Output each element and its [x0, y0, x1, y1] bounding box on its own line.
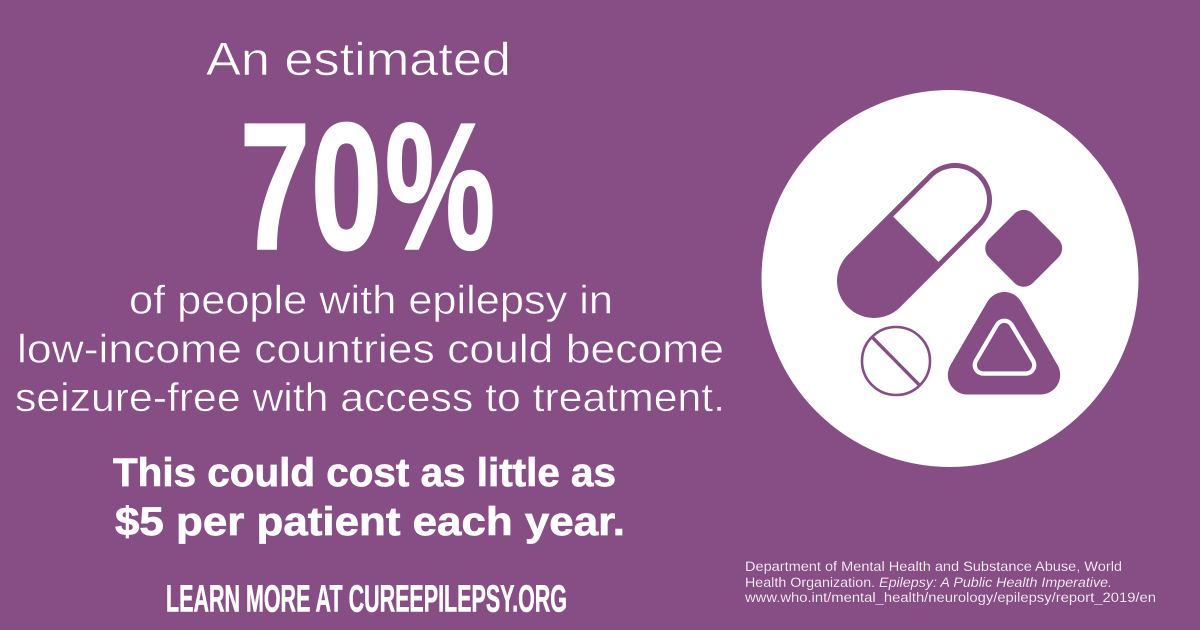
source citation: Health Organization. Epilepsy: A Public Health Imperative. [745, 575, 1112, 590]
text block: statement: of people with epilepsy in [129, 278, 613, 322]
icon: medication in white circle [762, 90, 1138, 467]
text block: cost callout: This could cost as little as [113, 451, 616, 495]
source citation [744, 559, 1156, 605]
icon: diamond tablet [980, 204, 1068, 292]
icon: round scored tablet [862, 327, 930, 395]
icon: triangular tablet [967, 312, 1041, 375]
text block: cost callout: $5 per patient each year. [115, 500, 625, 544]
text block: statement: seizure-free with access to treatment. [15, 376, 725, 420]
white circle [762, 90, 1138, 467]
call to action: LEARN MORE AT CUREEPILEPSY.ORG [166, 578, 567, 620]
big number: 70%: 0 [311, 86, 382, 288]
source citation: www.who.int/mental_health/neurology/epilepsy/report_2019/en [744, 590, 1156, 605]
icon: capsule [874, 168, 987, 281]
heading: An estimated: An estimated [206, 33, 511, 85]
text block: cost callout [113, 451, 625, 544]
text block: statement [15, 278, 725, 420]
source citation: Department of Mental Health and Substance Abuse, World [745, 559, 1122, 574]
big number: 70%: 7 [240, 86, 310, 288]
big number: 70% [240, 86, 495, 288]
big number: 70%: % [385, 86, 495, 288]
text block: statement: low-income countries could become [17, 328, 724, 372]
